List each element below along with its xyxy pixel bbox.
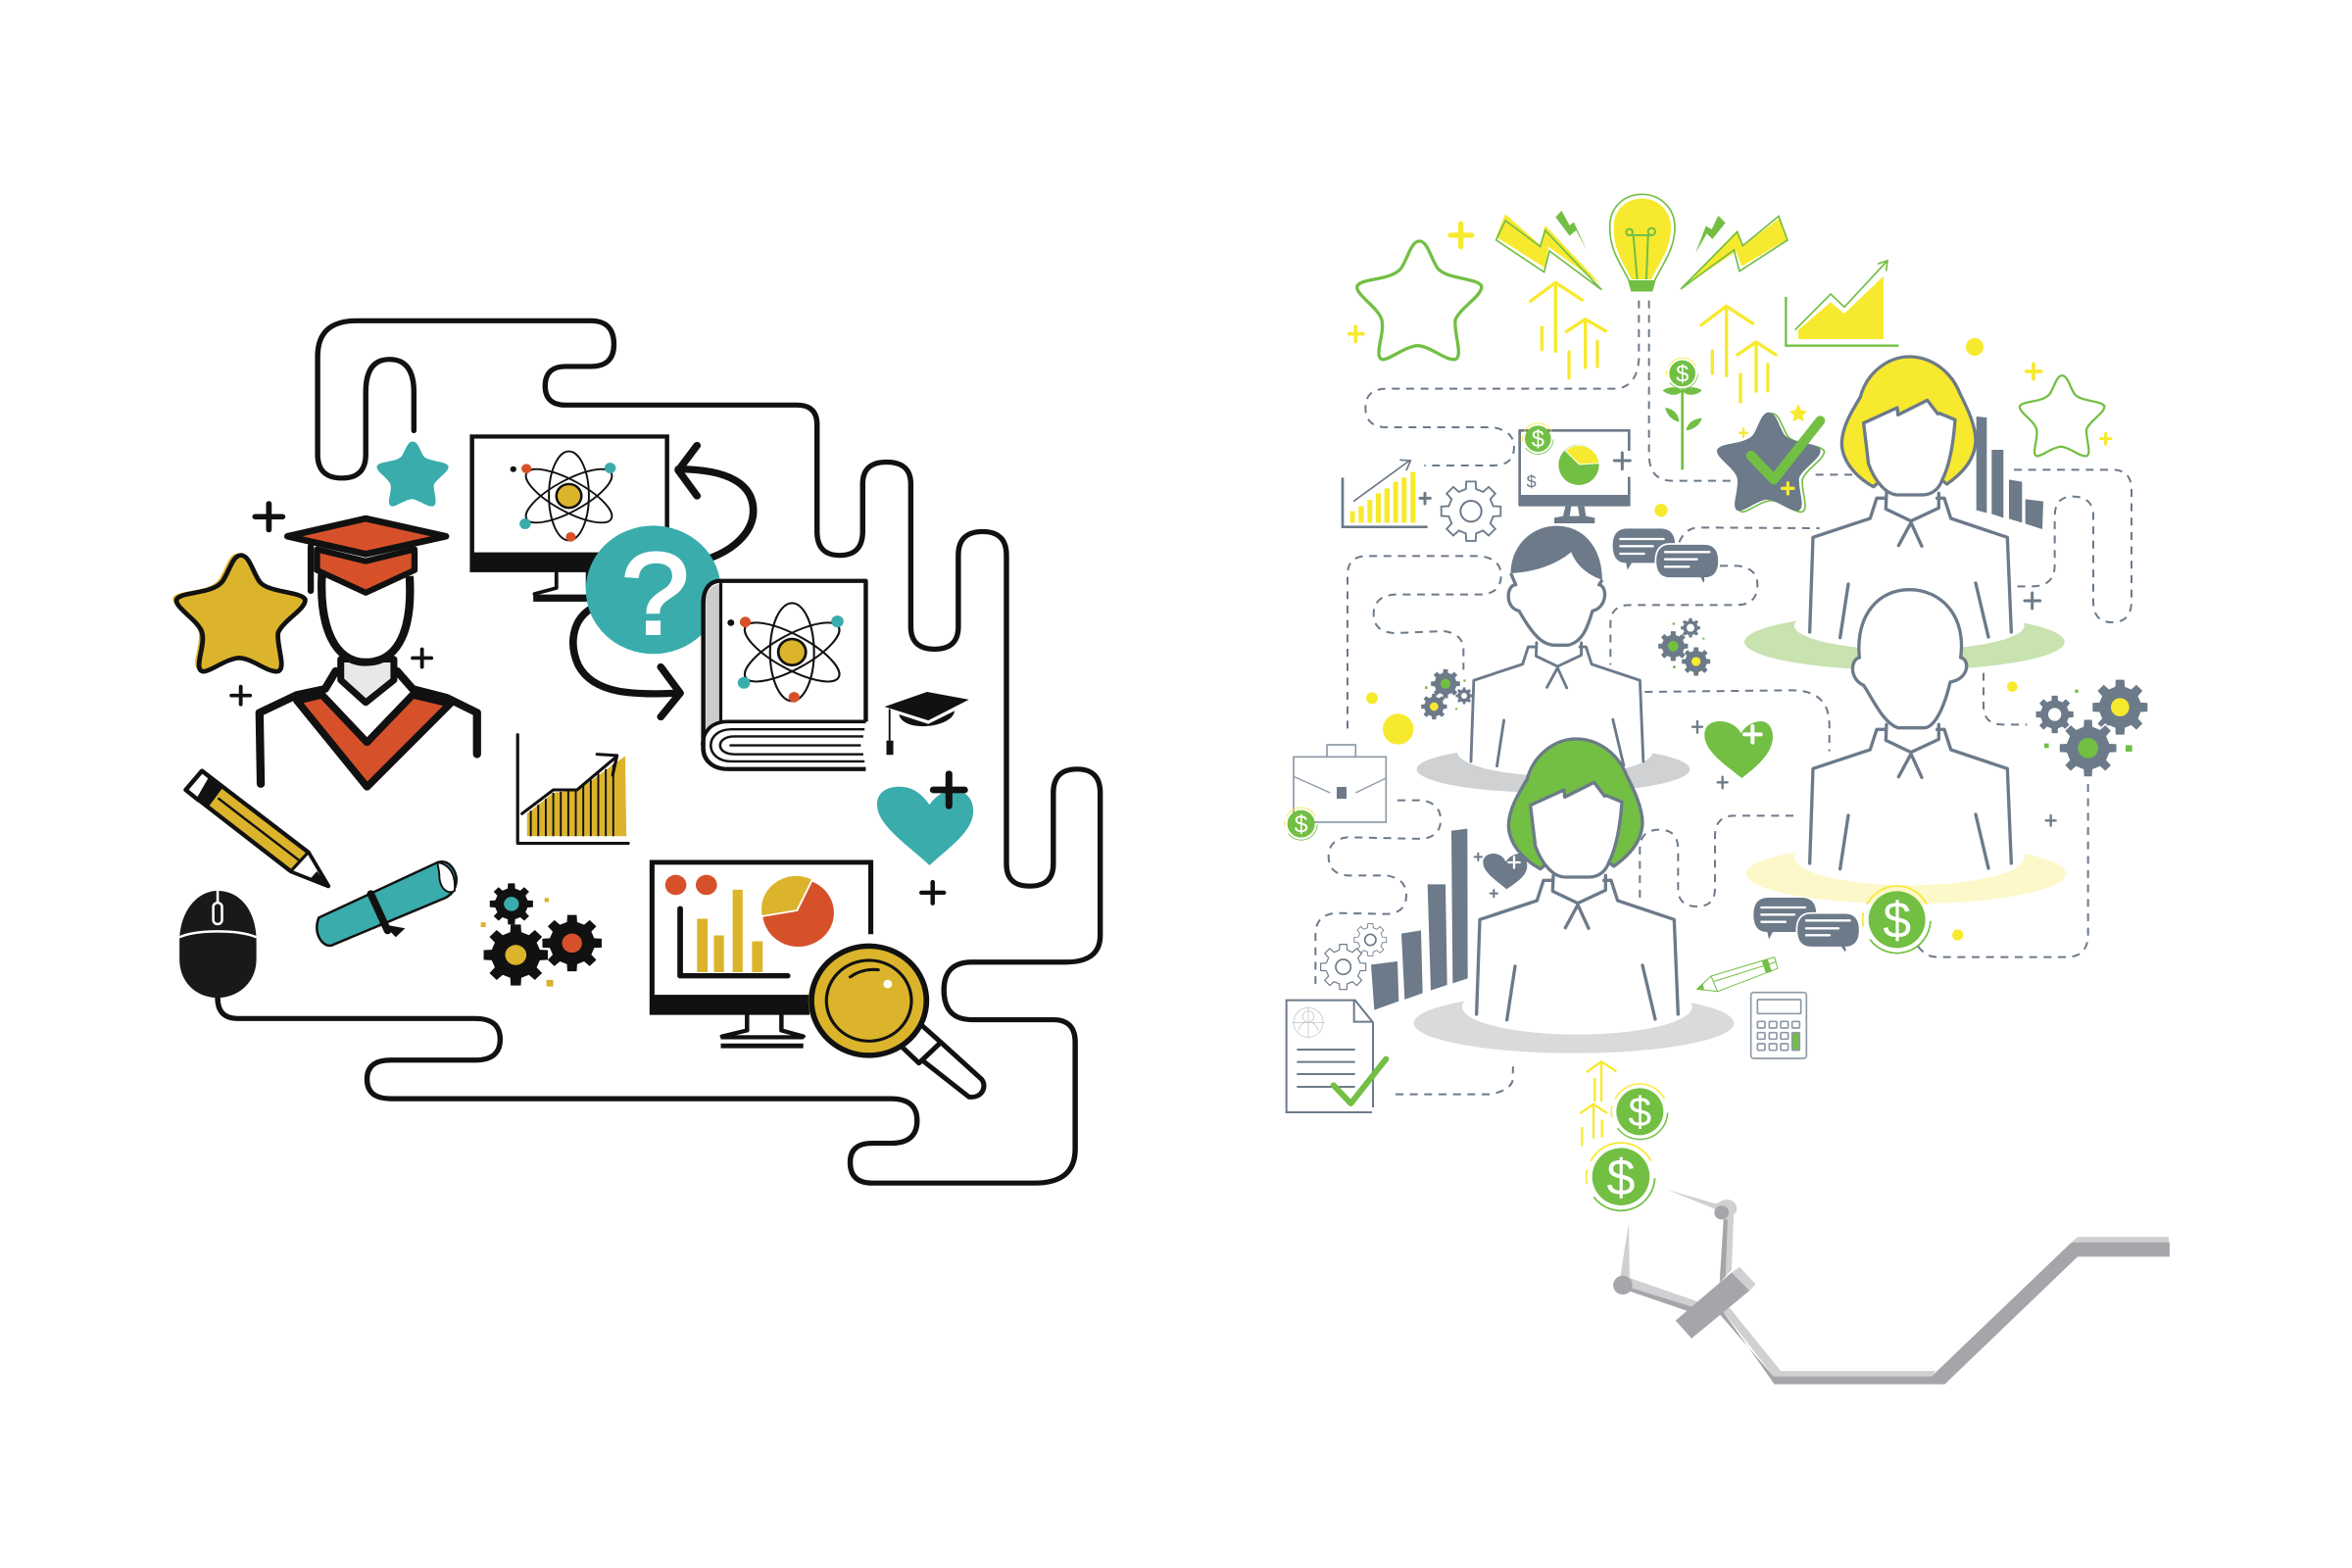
shoulder joint: [1717, 1200, 1737, 1217]
icon: green heart with plus: [1704, 721, 1773, 778]
person ring: back right: [1744, 613, 2065, 670]
cap top: [288, 518, 446, 554]
gown and shoulders: [260, 671, 477, 784]
person ring cut-out: front: [1462, 979, 1692, 1035]
cap base: [317, 550, 415, 593]
arm lower shadow: [1628, 1288, 1693, 1311]
monitor with pie chart: $: [1532, 427, 1544, 453]
yellow up arrows, right group: [1701, 306, 1776, 402]
question mark badge: ?: [621, 528, 689, 659]
icon: medium dollar coin: [1611, 1084, 1668, 1140]
bars behind woman: [1977, 416, 2043, 529]
icon: calculator: [1751, 993, 1806, 1058]
monitor with pie chart: $: [1527, 472, 1537, 492]
person: man with dark hair: [1471, 526, 1643, 766]
icon: arm dollar coin: [1587, 1143, 1655, 1210]
person: bald man: [1810, 590, 2011, 869]
person ring cut-out: back right: [1794, 601, 2025, 650]
monitor with charts: [650, 862, 871, 1049]
icon: right lightning bolt: [1681, 216, 1788, 289]
clamp bar light: [1732, 1267, 1755, 1291]
panel: education illustration: [172, 320, 1101, 1183]
monitor with pie chart: [1519, 423, 1630, 523]
icon: document with check: [1287, 1001, 1386, 1112]
person ring: back left: [1417, 746, 1690, 793]
face: [321, 573, 410, 662]
area chart with arrow: [1786, 261, 1898, 346]
clamp bar dark: [1676, 1272, 1749, 1339]
person: woman with yellow hair: [1810, 357, 2011, 638]
icon: computer mouse: [179, 891, 257, 998]
person ring: front right: [1746, 844, 2066, 904]
speech bubbles, upper: [1613, 528, 1719, 585]
speech bubbles, lower: [1753, 898, 1860, 954]
rail dark face: [1720, 1243, 2170, 1384]
icon: light bulb: [1610, 194, 1675, 291]
graduate figure: [260, 518, 477, 787]
arm upper segment: [1668, 1190, 1734, 1283]
icon: small graduation cap: [885, 692, 969, 755]
icon: dollar flower: [1663, 358, 1702, 469]
icon: green pencil: [1697, 957, 1778, 992]
icon: gold star: [172, 554, 305, 671]
icon: left lightning bolt: [1496, 211, 1601, 290]
yellow up arrows near coins: [1580, 1061, 1616, 1146]
monitor with atom: [472, 436, 667, 602]
icon: black gears: [481, 883, 602, 987]
icon: gears with colored hubs: [2036, 680, 2147, 777]
icon: green outline star: [1357, 241, 1482, 360]
icon: teal heart with plus: [877, 774, 973, 865]
icon: teal star: [378, 443, 447, 505]
icon: pencil: [186, 771, 329, 887]
question mark badge: [586, 525, 721, 659]
bar chart with arrow: [1343, 460, 1430, 527]
rising bar chart: [1371, 829, 1468, 1010]
icon: small gray heart: [1475, 854, 1527, 897]
yellow plus signs: [1349, 223, 2111, 444]
person ring: front: [1414, 993, 1734, 1054]
icon: large dollar coin: $: [1883, 891, 1911, 948]
icon: diploma scroll: [317, 861, 457, 946]
person ring cut-out: back left: [1457, 727, 1653, 776]
person ring cut-out: front right: [1794, 830, 2025, 885]
book with atom: [703, 581, 865, 769]
person: woman with green hair: [1477, 739, 1678, 1020]
icon: large dollar coin: [1863, 886, 1931, 954]
yellow dots: [1366, 338, 2018, 941]
gears cluster, center: [1658, 618, 1710, 675]
icon: outline gears, lower left: [1321, 924, 1387, 990]
robotic arm and rail: [1613, 1190, 2170, 1384]
icon: small green outline star: [2020, 375, 2104, 456]
orange stole: [297, 695, 450, 787]
growth chart: [517, 735, 628, 844]
icon: dollar flower: $: [1676, 362, 1689, 387]
tassel: [306, 547, 316, 591]
icon: dark star with check: [1718, 404, 1824, 512]
rail light face: [1722, 1237, 2169, 1376]
icon: briefcase: [1285, 745, 1386, 840]
icon: briefcase: $: [1295, 810, 1308, 838]
icon: magnifying glass: [808, 946, 984, 1097]
arm upper shadow: [1720, 1219, 1728, 1283]
panel: business team illustration: [1285, 194, 2147, 1146]
neck: [341, 660, 394, 703]
shoulder joint inner: [1714, 1205, 1729, 1219]
icon: medium dollar coin: $: [1628, 1089, 1651, 1136]
dashed connector paths: [1315, 301, 2132, 1095]
plus signs: [231, 504, 944, 904]
gears cluster, left: [1421, 669, 1473, 719]
elbow joint: [1613, 1276, 1633, 1295]
icon: arm dollar coin: $: [1607, 1150, 1635, 1206]
gray plus signs: [1692, 593, 2056, 826]
yellow up arrows, left group: [1531, 282, 1605, 378]
winding cable line: [218, 320, 1101, 1183]
icon: outline gear: [1442, 481, 1500, 541]
curved arrows: [573, 446, 754, 716]
arm lower segment: [1620, 1223, 1697, 1307]
